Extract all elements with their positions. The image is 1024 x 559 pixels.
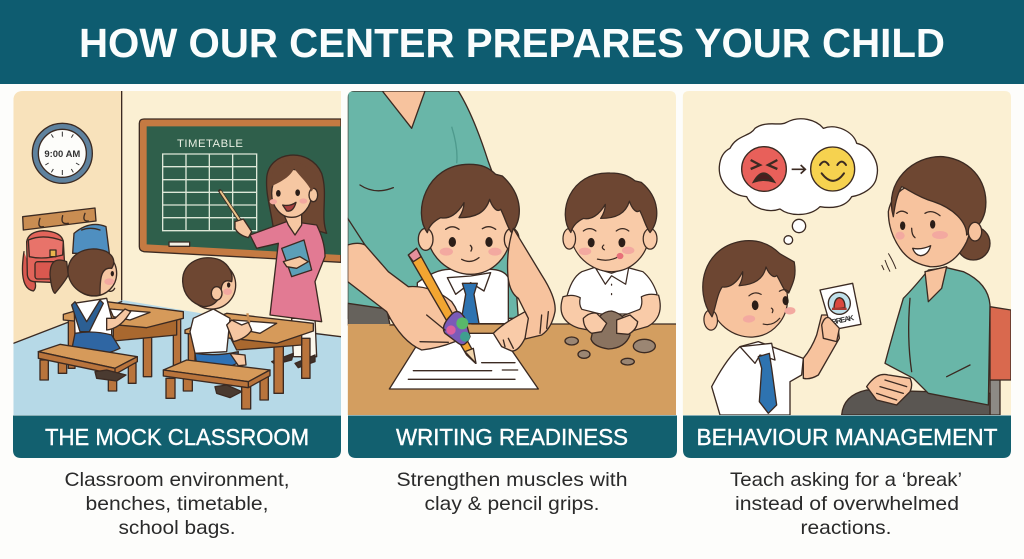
description: behaviour management: Teach asking for a ‘break’ [730,469,962,491]
clock [32,123,92,183]
adult hand guiding [493,228,555,351]
bench, right [163,360,270,409]
adult in teal shirt [348,91,518,325]
panel: behaviour management [683,91,1011,539]
coat rail and school bags [22,208,109,291]
boy holding card [699,237,861,415]
heading bar: writing readiness [348,416,677,458]
teacher [842,157,990,415]
heading bar: the mock classroom [13,416,341,458]
adult arm and writing hand [348,243,459,350]
girl student [50,249,131,355]
pencil with rainbow grip [408,248,476,363]
illustration: classroom scene [13,91,341,415]
heading bar: writing readiness: WRITING READINESS [396,424,628,450]
description: behaviour management: reactions. [800,517,892,539]
description: the mock classroom: benches, timetable, [86,493,268,515]
illustration: pencil grip and clay [348,91,676,415]
table [348,324,676,415]
break card [820,283,861,342]
break card: BREAK [831,313,855,327]
teacher [220,155,327,368]
boy with clay [561,173,660,333]
thought bubble [719,119,877,244]
heading bar: the mock classroom: THE MOCK CLASSROOM [45,424,309,450]
heading bar: behaviour management: BEHAVIOUR MANAGEMENT [696,424,998,450]
description: writing readiness: clay & pencil grips. [424,493,600,515]
title band: HOW OUR CENTER PREPARES YOUR CHILD [79,20,945,66]
description: the mock classroom: Classroom environment, [64,469,290,491]
heading bar: behaviour management [683,416,1011,458]
description: writing readiness: Strengthen muscles with [396,469,628,491]
arrow [792,165,805,174]
boy writing [417,164,519,324]
chalkboard: TIMETABLE [177,138,243,150]
panel: writing readiness [348,91,677,515]
desk, left [63,302,183,377]
desk, right [185,313,313,393]
worksheet paper [389,333,538,389]
chair [990,307,1011,415]
clock: 9:00 AM [44,149,80,159]
panel: the mock classroom [13,91,341,539]
icon: angry face [742,147,786,191]
description: the mock classroom: school bags. [118,517,236,539]
chalkboard [139,119,341,262]
bench, left [38,344,137,391]
description: behaviour management: instead of overwhelmed [735,493,959,515]
illustration: break card conversation [683,91,1011,415]
title band [0,0,1024,84]
clay ball and pieces [565,311,655,365]
icon: happy face [811,147,855,191]
boy student [183,258,252,369]
